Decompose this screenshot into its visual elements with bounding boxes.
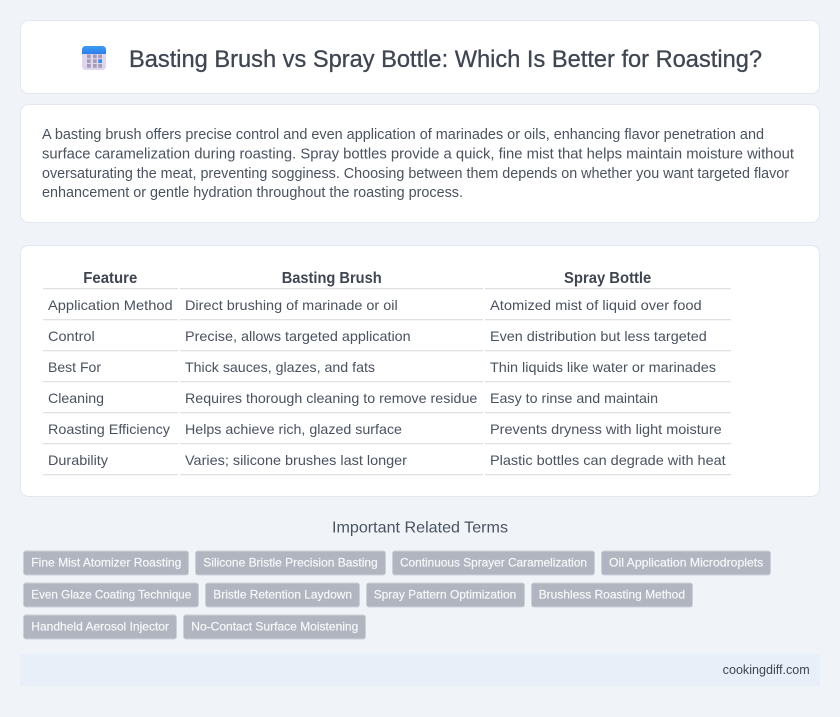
tag — [24, 615, 176, 639]
tag: Fine Mist Atomizer Roasting — [31, 556, 181, 570]
row: control: Control — [48, 328, 95, 344]
row: durability — [43, 452, 731, 475]
row: best for: Thick sauces, glazes, and fats — [185, 359, 375, 375]
tag: Bristle Retention Laydown — [213, 588, 352, 602]
tag: Brushless Roasting Method — [539, 588, 685, 602]
row: cleaning: Cleaning — [48, 390, 104, 406]
description text: A basting brush offers precise control and even application of marinades or oils, enhancing flavor penetration and — [42, 127, 764, 143]
row: durability: Durability — [48, 452, 108, 468]
row: control: Precise, allows targeted application — [185, 328, 411, 344]
tag: Oil Application Microdroplets — [609, 556, 763, 570]
tag — [366, 583, 524, 607]
row: roasting efficiency — [43, 421, 731, 444]
row: best for: Thin liquids like water or marinades — [490, 359, 716, 375]
tag — [184, 615, 366, 639]
panel: comparison table — [20, 246, 820, 496]
row: control: Even distribution but less targeted — [490, 328, 707, 344]
row: durability: Plastic bottles can degrade with heat — [490, 452, 726, 468]
row: application method: Atomized mist of liquid over food — [490, 297, 702, 313]
tag — [206, 583, 360, 607]
row: roasting efficiency: Helps achieve rich, glazed surface — [185, 421, 402, 437]
row: best for — [43, 359, 731, 382]
row: control — [43, 328, 731, 351]
row: cleaning: Easy to rinse and maintain — [490, 390, 658, 406]
tag: Continuous Sprayer Caramelization — [400, 556, 587, 570]
heading: important related terms: Important Related Terms — [332, 520, 508, 537]
row: cleaning: Requires thorough cleaning to remove residue — [185, 390, 478, 406]
description text — [42, 127, 794, 201]
header panel — [20, 20, 820, 94]
table header row — [43, 270, 731, 289]
row: application method: Direct brushing of marinade or oil — [185, 297, 398, 313]
description text: enhancement or gentle hydration throughout the roasting process. — [42, 185, 463, 201]
row: application method — [43, 297, 731, 320]
tag — [532, 583, 692, 607]
row: roasting efficiency: Roasting Efficiency — [48, 421, 170, 437]
row: cleaning — [43, 390, 731, 413]
tag — [392, 551, 594, 575]
row: roasting efficiency: Prevents dryness with light moisture — [490, 421, 722, 437]
tag: No-Contact Surface Moistening — [191, 620, 358, 634]
tag — [602, 551, 770, 575]
tag: Spray Pattern Optimization — [374, 588, 516, 602]
tag — [24, 551, 188, 575]
table header row: Basting Brush — [282, 270, 382, 287]
description text: oversaturating the meat, preventing sogginess. Choosing between them depends on whether you want targeted flavor — [42, 166, 789, 182]
related terms tags — [24, 551, 770, 639]
tag — [24, 583, 198, 607]
tag: Handheld Aerosol Injector — [31, 620, 169, 634]
tag: Even Glaze Coating Technique — [31, 588, 192, 602]
description text: surface caramelization during roasting. Spray bottles provide a quick, fine mist that helps maintain moisture without — [42, 146, 794, 162]
tag: Silicone Bristle Precision Basting — [203, 556, 378, 570]
tag — [196, 551, 386, 575]
icon: calendar — [82, 46, 106, 70]
footer source text: cookingdiff.com — [723, 663, 810, 677]
panel: description — [20, 104, 820, 222]
row: best for: Best For — [48, 359, 101, 375]
row: durability: Varies; silicone brushes last longer — [185, 452, 407, 468]
footer bar — [20, 654, 820, 686]
title: Basting Brush vs Spray Bottle: Which Is Better for Roasting? — [129, 46, 762, 73]
row: application method: Application Method — [48, 297, 173, 313]
table header row: Feature — [83, 270, 137, 287]
table header row: Spray Bottle — [564, 270, 651, 287]
